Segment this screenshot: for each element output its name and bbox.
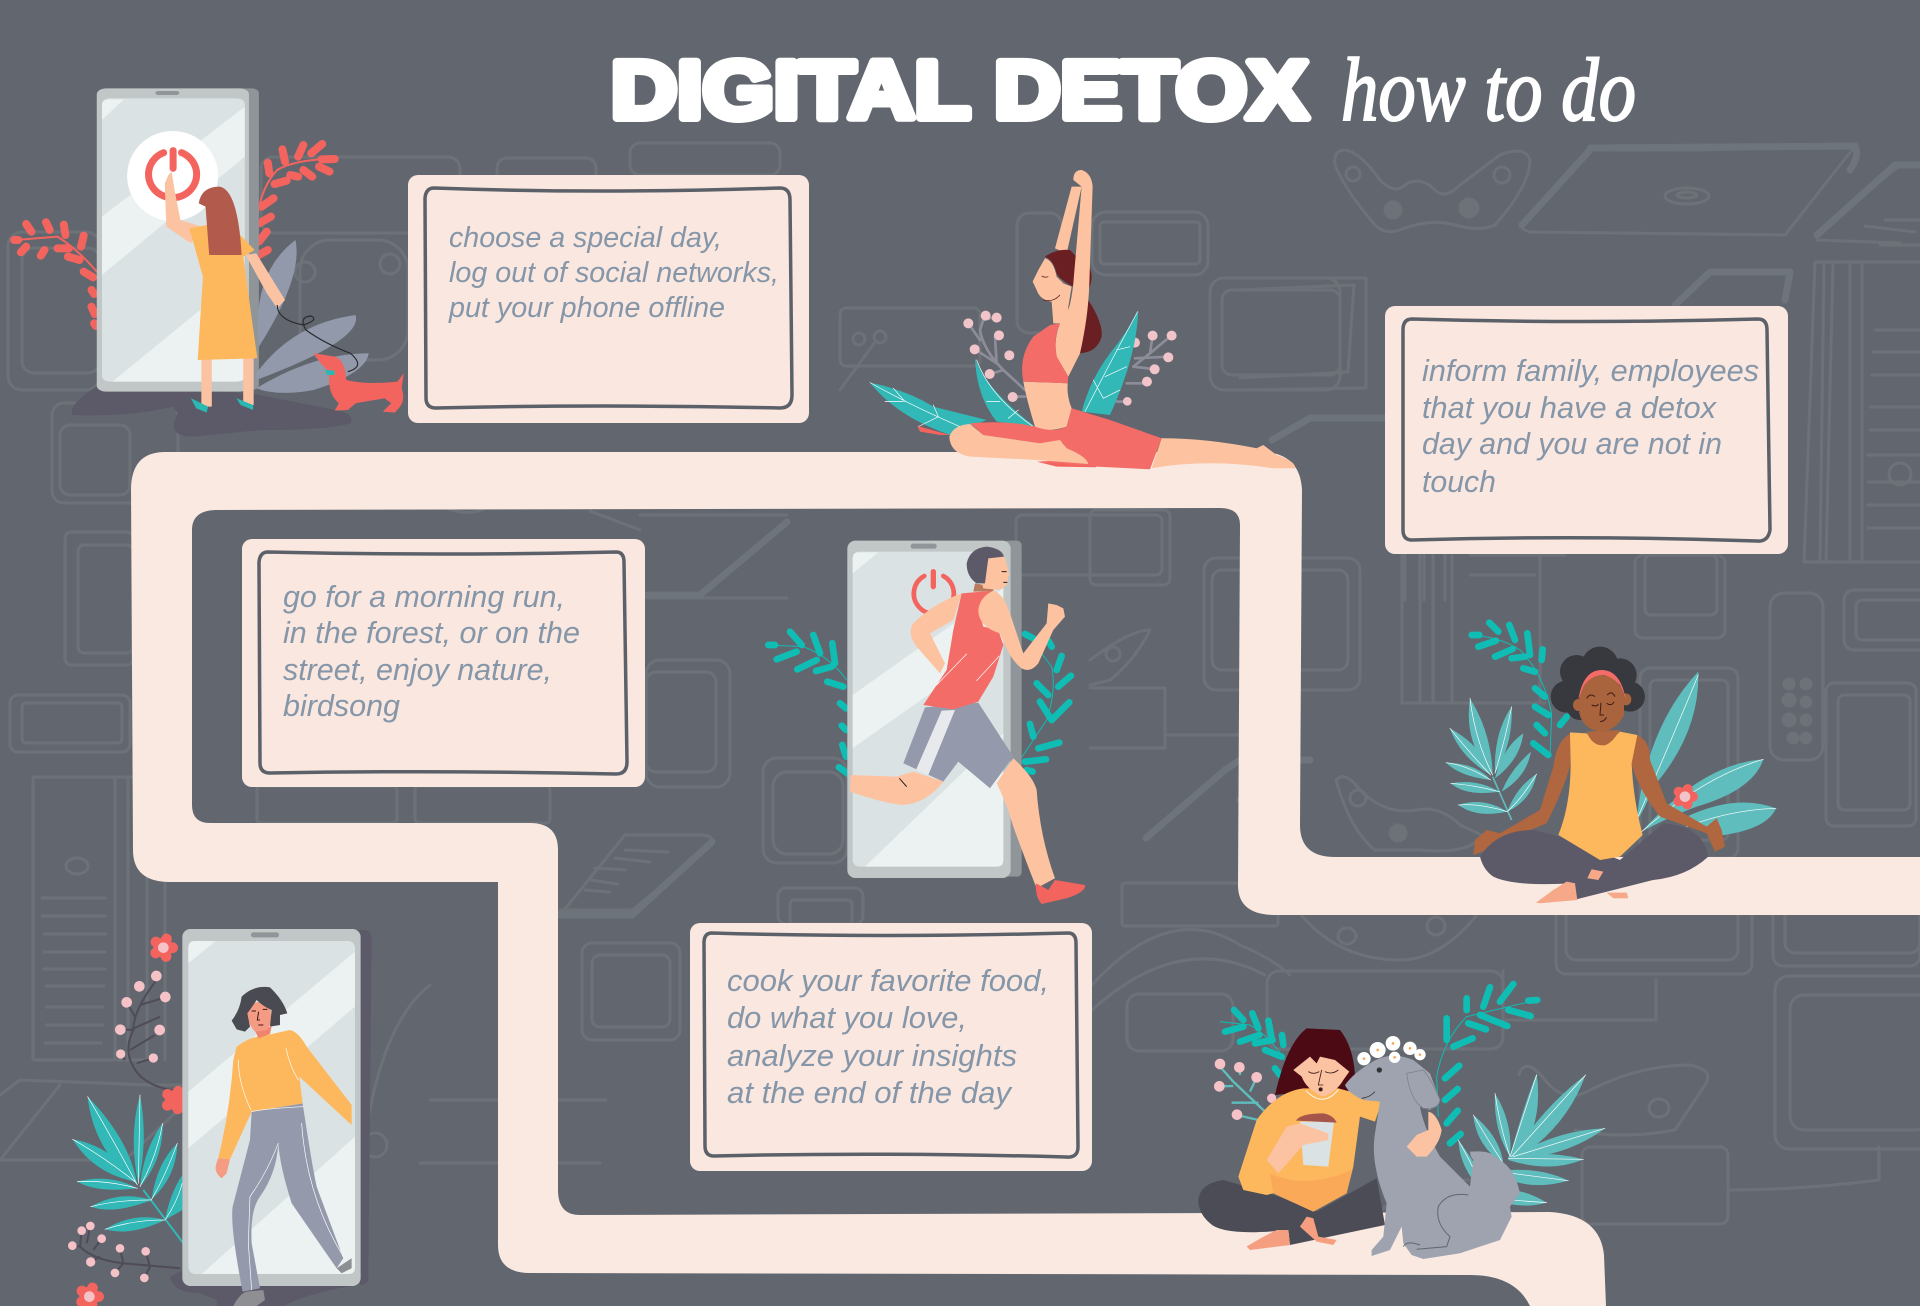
text: step 4: analyze your insights (727, 1038, 1017, 1073)
text: step 2: inform family, employees (1422, 353, 1759, 388)
right plant (1458, 1073, 1605, 1206)
flower (1676, 787, 1694, 806)
text: step 4: do what you love, (727, 1000, 967, 1035)
shadow (170, 930, 372, 1306)
teal leaves (870, 311, 1138, 435)
title (611, 41, 1636, 140)
leash (277, 305, 358, 372)
text: step 3: in the forest, or on the (283, 615, 580, 650)
dog (314, 353, 404, 413)
illustration: woman switching off phone with dog (14, 88, 404, 437)
icon: phone (182, 929, 361, 1286)
icon: gray leaves (256, 240, 369, 393)
icon: phone (97, 88, 259, 392)
text: step 3: birdsong (283, 688, 400, 723)
text: step 1: choose a special day, (449, 222, 722, 254)
woman (165, 172, 285, 413)
panel: step 2 text box (1385, 306, 1788, 554)
body (1473, 670, 1725, 903)
text: step 1: put your phone offline (448, 292, 725, 324)
panel: step 3 text box (242, 539, 645, 787)
text: step 2 (1422, 353, 1759, 499)
text: step 2: day and you are not in (1422, 426, 1722, 461)
teal plant (73, 1095, 183, 1243)
woman (1198, 1028, 1385, 1250)
text: step 4 (727, 963, 1049, 1110)
coffee cup (1296, 1113, 1337, 1167)
berry branches (68, 971, 180, 1282)
dog (1345, 1036, 1520, 1259)
text: step 4: cook your favorite food, (727, 963, 1049, 998)
teal sprig (1470, 623, 1567, 757)
teal sprigs (1220, 984, 1537, 1143)
illustration: yoga woman (870, 170, 1295, 469)
panel: step 1 text box (408, 175, 809, 423)
panel: step 4 text box (690, 923, 1092, 1171)
text: step 2: touch (1422, 464, 1496, 499)
woman (216, 987, 352, 1306)
hair (1551, 647, 1645, 720)
text: step 3 (283, 579, 580, 723)
woman (917, 170, 1295, 469)
ground shadow (72, 385, 351, 437)
text: step 4: at the end of the day (727, 1075, 1014, 1110)
flowers (79, 938, 185, 1306)
icon: phone (847, 541, 1022, 878)
pink berry branch (1214, 1059, 1276, 1120)
left plant (1446, 698, 1537, 820)
icon: red sprigs (14, 144, 335, 326)
text: step 3: go for a morning run, (283, 579, 565, 614)
icon: power button (127, 131, 218, 221)
text: step 3: street, enjoy nature, (283, 652, 552, 687)
runner (850, 547, 1085, 904)
winding path (131, 452, 1920, 1306)
text: step 1 (448, 222, 779, 324)
illustration: woman walking out of phone (68, 929, 372, 1306)
text: step 1: log out of social networks, (449, 257, 779, 289)
teal sprigs (767, 632, 1071, 773)
berry branches (963, 311, 1177, 406)
hand on dog (1407, 1112, 1442, 1157)
illustration: runner with phone (767, 541, 1085, 904)
illustration: woman with dog and coffee (1198, 984, 1605, 1259)
illustration: meditating woman (1446, 623, 1776, 903)
heading: how to do: how to do (1341, 41, 1636, 140)
right leaves (1637, 672, 1776, 836)
text: step 2: that you have a detox (1422, 390, 1717, 425)
flower crown (1357, 1036, 1426, 1065)
icon: power symbol (914, 572, 954, 614)
heading: DIGITAL DETOX: DIGITAL DETOX (611, 45, 1308, 136)
